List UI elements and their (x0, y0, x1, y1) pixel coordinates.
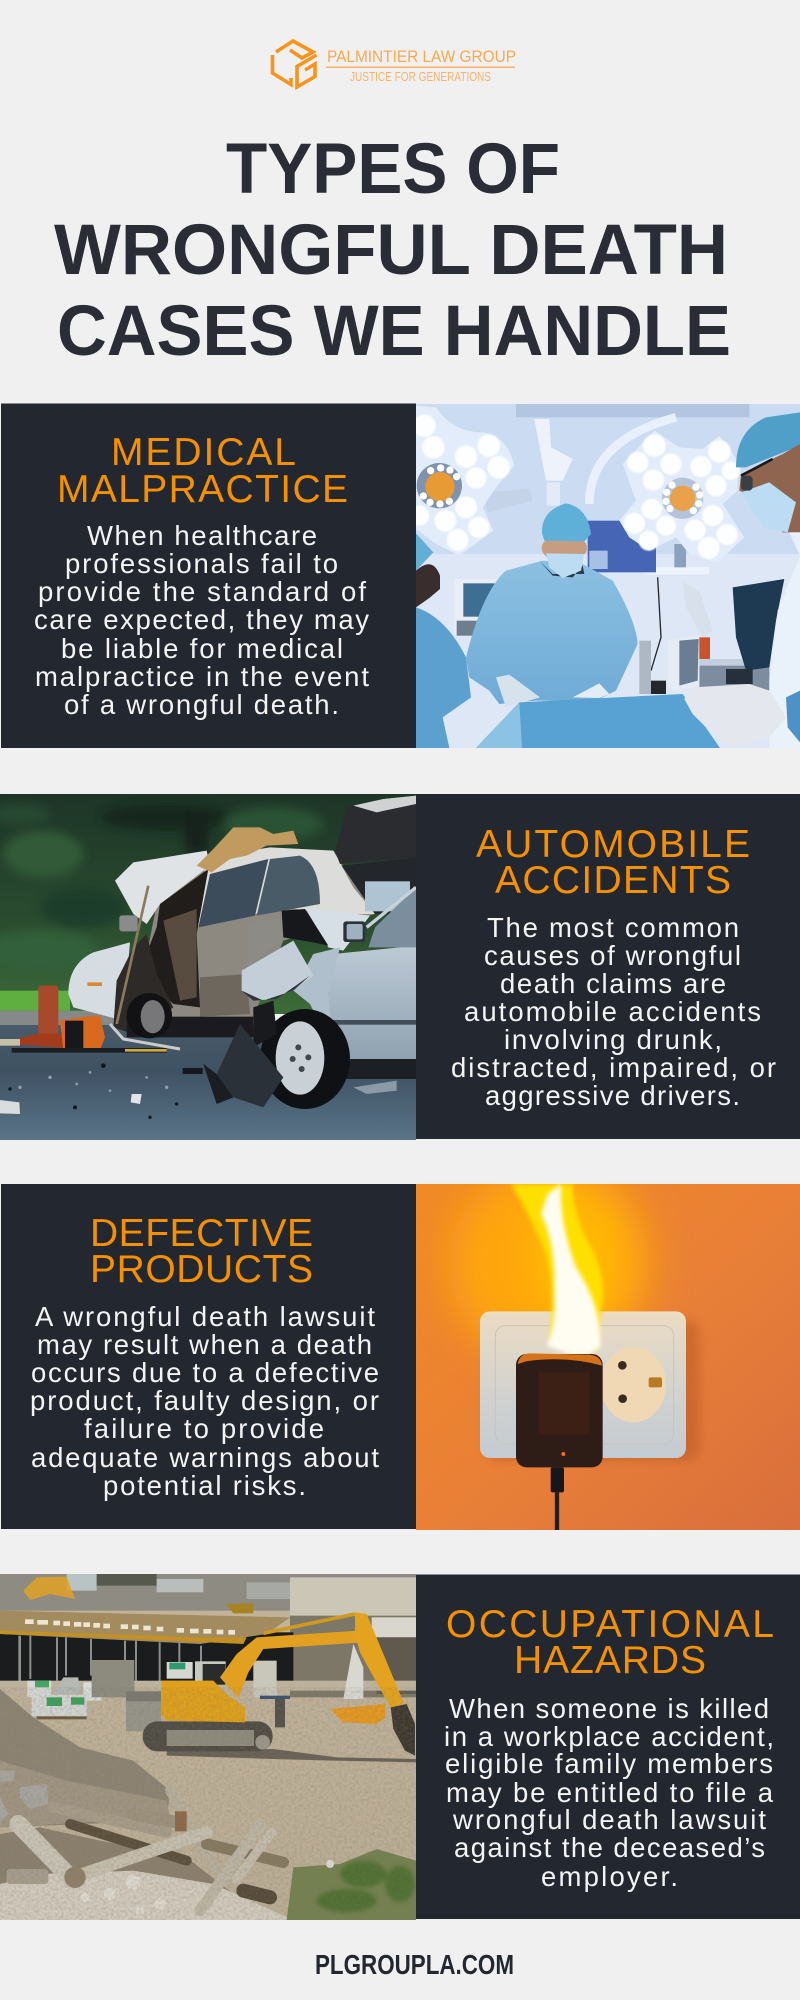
heading: occupational hazards: OCCUPATIONAL (446, 1603, 774, 1646)
body text: defective products: occurs due to a defective (31, 1357, 379, 1388)
body text: defective products: A wrongful death lawsuit (35, 1301, 375, 1332)
heading: occupational hazards (446, 1603, 774, 1682)
body text: automobile accidents: involving drunk, (504, 1024, 722, 1055)
heading: occupational hazards: HAZARDS (514, 1639, 706, 1682)
heading: medical malpractice: MALPRACTICE (57, 468, 348, 511)
photo: car crash scene (0, 794, 416, 1140)
body text: medical malpractice (34, 520, 369, 720)
body text: medical malpractice: malpractice in the event (35, 661, 369, 692)
footer website: PLGROUPLA.COM (315, 1949, 514, 1980)
logo rule (326, 66, 515, 68)
text card background (416, 1574, 800, 1919)
title: WRONGFUL DEATH (54, 211, 728, 290)
title: CASES WE HANDLE (57, 292, 731, 371)
photo: burning plug adapter in wall socket (416, 1164, 800, 1530)
panel: occupational hazards (0, 1574, 800, 1920)
heading: defective products: PRODUCTS (90, 1248, 313, 1291)
body text: automobile accidents: causes of wrongful (484, 940, 741, 971)
body text: defective products (30, 1301, 379, 1501)
body text: automobile accidents: distracted, impaired, or (451, 1052, 776, 1083)
panel: automobile accidents (0, 794, 800, 1140)
body text: occupational hazards: employer. (541, 1861, 678, 1892)
panel: defective products (1, 1164, 800, 1530)
body text: occupational hazards: may be entitled to file a (446, 1777, 774, 1808)
body text: defective products: failure to provide (84, 1413, 324, 1444)
body text: automobile accidents: aggressive drivers. (485, 1080, 740, 1111)
body text: automobile accidents: death claims are (500, 968, 726, 999)
body text: medical malpractice: of a wrongful death. (64, 689, 339, 720)
heading: automobile accidents (476, 823, 750, 902)
heading: defective products: DEFECTIVE (90, 1212, 313, 1255)
body text: occupational hazards (444, 1693, 774, 1892)
body text: defective products: potential risks. (103, 1470, 306, 1501)
body text: medical malpractice: care expected, they may (34, 604, 369, 635)
body text: medical malpractice: When healthcare (87, 520, 317, 551)
body text: occupational hazards: eligible family members (445, 1748, 773, 1779)
body text: occupational hazards: When someone is killed (449, 1693, 769, 1724)
body text: occupational hazards: wrongful death lawsuit (452, 1804, 766, 1835)
body text: defective products: adequate warnings about (31, 1442, 379, 1473)
body text: automobile accidents: The most common (487, 912, 739, 943)
logo name: PALMINTIER LAW GROUP (327, 47, 516, 66)
logo: Palmintier Law Group (272, 41, 516, 87)
text card background (416, 794, 800, 1139)
icon: PLG hexagon cube (272, 41, 316, 87)
body text: defective products: may result when a death (37, 1329, 372, 1360)
photo: surgeons in operating room (409, 404, 800, 748)
logo tagline: JUSTICE FOR GENERATIONS (350, 69, 491, 84)
body text: defective products: product, faulty design, or (30, 1385, 379, 1416)
body text: occupational hazards: against the deceased’s (454, 1832, 765, 1863)
heading: medical malpractice: MEDICAL (111, 431, 296, 474)
heading: automobile accidents: ACCIDENTS (495, 859, 731, 902)
body text: occupational hazards: in a workplace accident, (444, 1721, 774, 1752)
heading: medical malpractice (57, 431, 348, 511)
heading: defective products (90, 1212, 313, 1291)
title: TYPES OF (226, 130, 560, 209)
photo: excavator on construction site (0, 1574, 416, 1920)
van base (133, 851, 375, 1024)
panel: medical malpractice (1, 404, 800, 748)
body text: medical malpractice: professionals fail to (65, 548, 338, 579)
body text: medical malpractice: provide the standard of (38, 576, 366, 607)
heading: automobile accidents: AUTOMOBILE (476, 823, 750, 866)
text card background (1, 404, 416, 748)
text card background (1, 1184, 416, 1529)
body text: medical malpractice: be liable for medical (61, 633, 343, 664)
body text: automobile accidents (451, 912, 776, 1111)
title (54, 130, 731, 371)
body text: automobile accidents: automobile accidents (464, 996, 761, 1027)
